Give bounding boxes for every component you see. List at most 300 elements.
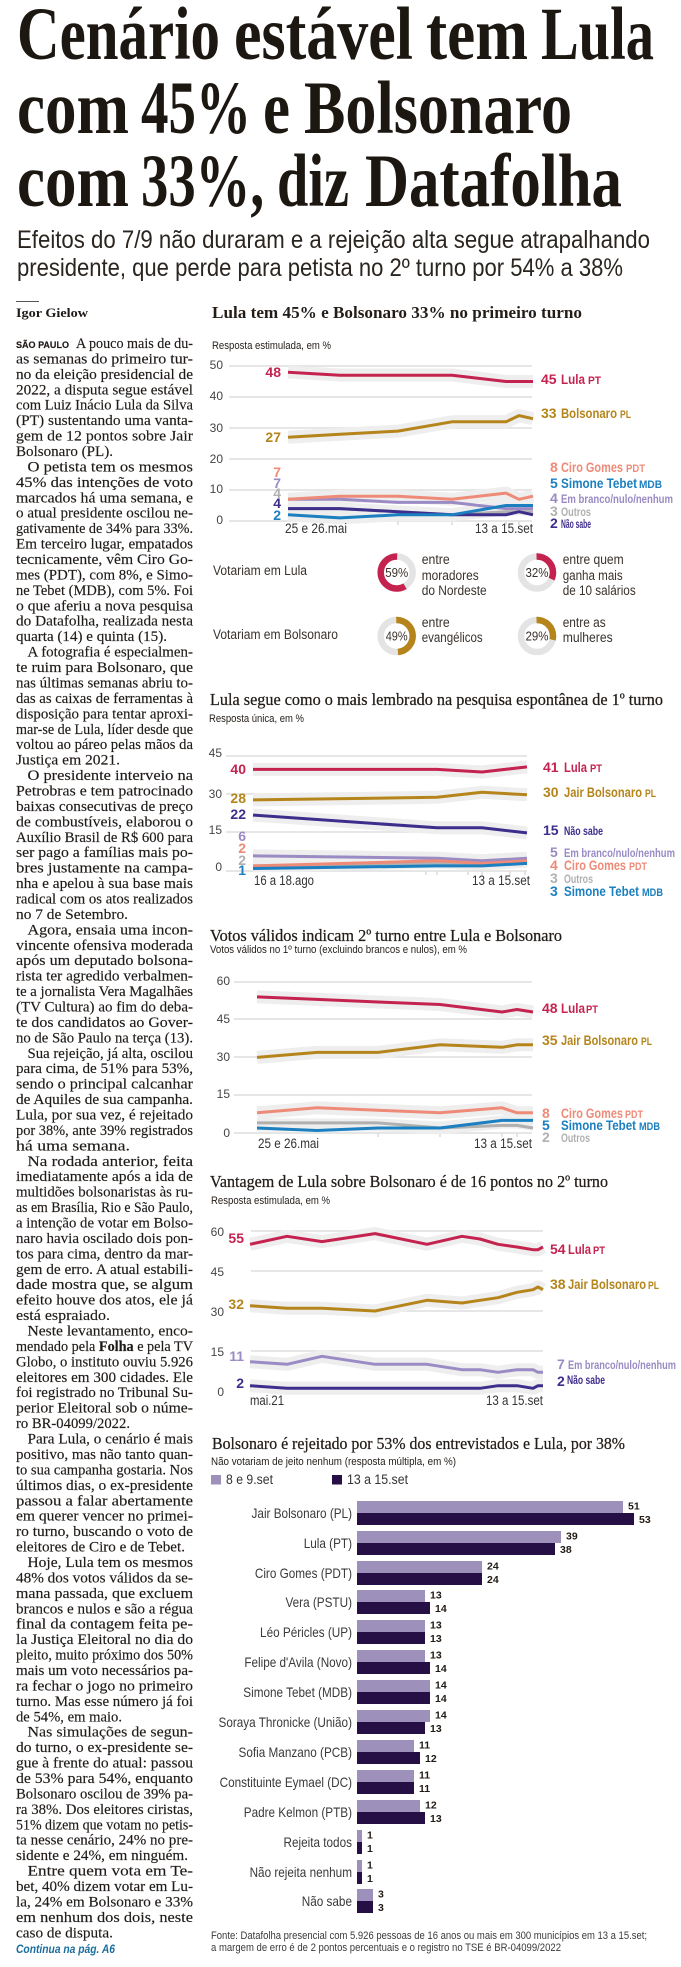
- end labels: PT: [586, 1004, 598, 1016]
- end labels: 30: [543, 784, 559, 800]
- line series: [288, 372, 533, 518]
- start labels: [265, 364, 281, 523]
- article body text: sendo o principal calcanhar: [16, 1077, 193, 1093]
- title: com: [17, 140, 129, 223]
- end labels: Simone Tebet: [561, 1117, 636, 1133]
- bar values: 3: [378, 1888, 384, 1900]
- bar values: 13: [430, 1813, 442, 1825]
- article body text: gem de erro. A atual estabili-: [16, 1262, 193, 1278]
- article body text: em nenhum dos dois, neste: [16, 1910, 193, 1926]
- article body text: por 38%, ante 39% registrados: [16, 1123, 193, 1139]
- start labels: 32: [228, 1296, 244, 1312]
- article body text: caso de disputa.: [16, 1925, 113, 1941]
- y axis: 45: [211, 1265, 224, 1279]
- article body text: no da eleição presidencial de: [16, 367, 193, 383]
- article body text: há uma semana.: [16, 1138, 130, 1154]
- article body text: perior Eleitoral sob o núme-: [16, 1401, 193, 1417]
- bar values: 51: [628, 1500, 640, 1512]
- article body text: Para Lula, o cenário é mais: [28, 1432, 193, 1448]
- article body text: ra fechar o jogo no primeiro: [16, 1678, 193, 1694]
- candidate names: Jair Bolsonaro (PL): [252, 1506, 352, 1521]
- start labels: 22: [230, 806, 246, 822]
- end labels: Ciro Gomes: [564, 857, 626, 873]
- article body text: voltou ao páreo pelas mãos da: [16, 737, 193, 753]
- start labels: 6: [238, 828, 246, 844]
- article body text: disposição para tentar aproxi-: [16, 706, 193, 722]
- line series: [257, 997, 533, 1130]
- article body text: 2022, a disputa segue estável: [16, 382, 193, 398]
- article body text: de combustíveis, elaborou o: [16, 814, 193, 830]
- article body text: efeito houve dos atos, ele já: [16, 1293, 193, 1309]
- byline: Igor Gielow: [16, 305, 89, 320]
- y axis: 30: [209, 787, 222, 801]
- article body text: Hoje, Lula tem os mesmos: [28, 1555, 193, 1571]
- end labels: 15: [543, 822, 559, 838]
- y axis: 30: [211, 1305, 224, 1319]
- x axis labels: 13 a 15.set: [475, 521, 533, 536]
- bar values: 24: [487, 1574, 499, 1586]
- article body text: bres justamente na campa-: [16, 861, 193, 877]
- end labels: PDT: [625, 1109, 643, 1121]
- article body text: rista ter agredido verbalmen-: [16, 969, 193, 985]
- article body text: mendado pela Folha e pela TV: [16, 1339, 193, 1355]
- article body text: te ruim para Bolsonaro, que: [16, 660, 193, 676]
- article body text: (PT) sustentando uma vanta-: [16, 413, 193, 429]
- end labels: [550, 1241, 676, 1389]
- start labels: 2: [238, 840, 246, 856]
- end labels: 3: [550, 503, 558, 519]
- chart note: Votos válidos no 1º turno (excluindo brancos e nulos), em %: [210, 944, 467, 956]
- article body text: A pouco mais de du-: [76, 336, 193, 352]
- y axis: 0: [217, 1385, 224, 1399]
- bar values: 38: [560, 1544, 572, 1556]
- bar values: 14: [435, 1680, 447, 1692]
- y axis: [209, 746, 222, 874]
- article body text: Em terceiro lugar, empatados: [16, 537, 193, 553]
- donut 59%: 59%: [385, 566, 408, 580]
- bar values: 1: [367, 1830, 373, 1842]
- end labels: 7: [557, 1356, 565, 1372]
- article body text: mais um voto necessários pa-: [16, 1663, 193, 1679]
- end labels: PT: [590, 763, 602, 775]
- article body text: as semanas do primeiro tur-: [16, 351, 193, 367]
- caption 59%: do Nordeste: [422, 583, 487, 598]
- end labels: 5: [550, 844, 558, 860]
- article body text: 51% dizem que votam no petis-: [16, 1817, 193, 1833]
- end labels: Outros: [564, 874, 593, 886]
- candidate names: Ciro Gomes (PDT): [255, 1566, 352, 1581]
- grid lines and uncertainty bands: [229, 366, 533, 525]
- x axis labels: 13 a 15.set: [486, 1393, 543, 1408]
- line series: [250, 1234, 543, 1388]
- legend: [211, 1472, 408, 1487]
- panel: donut breakdown: [213, 552, 636, 652]
- y axis: 40: [210, 389, 223, 403]
- caption 29%: entre as: [563, 615, 606, 630]
- chart note: Resposta única, em %: [209, 713, 304, 725]
- article body text: 48% dos votos válidos da se-: [16, 1570, 193, 1586]
- caption 29%: mulheres: [563, 630, 613, 645]
- end labels: 5: [550, 475, 558, 491]
- donut 29%: [521, 620, 553, 652]
- article body text: Entre quem vota em Te-: [28, 1864, 193, 1880]
- donut 29%: 29%: [526, 630, 548, 644]
- candidate names: Vera (PSTU): [285, 1595, 352, 1610]
- title: Datafolha: [365, 140, 622, 223]
- article body text: te a jornalista Vera Magalhães: [16, 984, 193, 1000]
- article body text: imediatamente após a ida de: [16, 1169, 193, 1185]
- y axis: 50: [210, 358, 223, 372]
- end labels: Outros: [561, 1133, 590, 1145]
- start labels: 4: [273, 495, 281, 511]
- article body text: dade mostra que, se algum: [16, 1277, 194, 1293]
- y axis: 0: [215, 860, 222, 874]
- article body text: naro havia oscilado dois pon-: [16, 1231, 193, 1247]
- grid lines and uncertainty bands: [234, 982, 533, 1137]
- article body text: nas últimas semanas abriu to-: [16, 676, 193, 692]
- x axis labels: [285, 521, 533, 536]
- y axis: [210, 358, 223, 527]
- article body text: (TV Cultura) ao fim do deba-: [16, 1000, 193, 1016]
- article body text: as em Brasília, Rio e São Paulo,: [16, 1200, 193, 1216]
- caption 49%: [422, 615, 483, 645]
- bar values: 11: [419, 1783, 430, 1795]
- x axis labels: 25 e 26.mai: [285, 521, 347, 536]
- article body text: do turno, o ex-presidente se-: [16, 1740, 193, 1756]
- article body text: multidões bolsonaristas às ru-: [16, 1185, 193, 1201]
- line series: [253, 767, 527, 868]
- start labels: 11: [229, 1348, 244, 1364]
- start labels: 2: [236, 1375, 244, 1391]
- start labels: 7: [273, 475, 281, 491]
- x axis labels: 13 a 15.set: [472, 873, 530, 888]
- title: 45%: [141, 67, 251, 150]
- article body text: para cima, de 51% para 53%,: [16, 1061, 193, 1077]
- start labels: 40: [230, 761, 246, 777]
- end labels: 35: [542, 1032, 558, 1048]
- end labels: Bolsonaro: [561, 405, 617, 421]
- end labels: MDB: [639, 1121, 660, 1133]
- panel: valid votes chart: [210, 926, 660, 1151]
- article body text: a intenção de votar em Bolso-: [16, 1216, 193, 1232]
- article body text: passou a falar abertamente: [16, 1493, 193, 1509]
- row label Lula: Votariam em Lula: [213, 563, 307, 578]
- article body text: Globo, o instituto ouviu 5.926: [16, 1354, 193, 1370]
- article body text: mes (PDT), com 8%, e Simo-: [16, 568, 193, 584]
- subtitle: [17, 226, 650, 282]
- heading: Lula segue como o mais lembrado na pesquisa espontânea de 1º turno: [210, 690, 663, 709]
- candidate names: Soraya Thronicke (União): [219, 1715, 352, 1730]
- start labels: 48: [265, 364, 281, 380]
- heading: Votos válidos indicam 2º turno entre Lula e Bolsonaro: [210, 926, 562, 945]
- article body text: Nas simulações de segun-: [28, 1725, 193, 1741]
- caption 32%: de 10 salários: [563, 583, 636, 598]
- article body text: A fotografia é especialmen-: [28, 645, 193, 661]
- bars dark: [357, 1513, 634, 1913]
- article body text: de 54%, em maio.: [16, 1709, 122, 1725]
- candidate names: Lula (PT): [304, 1536, 352, 1551]
- article body text: Lula, por sua vez, é rejeitado: [16, 1108, 193, 1124]
- bar values: 1: [367, 1860, 373, 1872]
- start labels: 1: [238, 862, 246, 878]
- chart note: Resposta estimulada, em %: [212, 340, 331, 352]
- donut 59%: [381, 556, 413, 588]
- y axis: 45: [209, 746, 222, 760]
- article body text: mana passada, que excluem: [16, 1586, 194, 1602]
- article body text: quarta (14) e quinta (15).: [16, 629, 167, 645]
- article body text: ro turno, buscando o voto de: [16, 1524, 193, 1540]
- end labels: PT: [593, 1245, 605, 1257]
- caption 59%: [422, 552, 487, 598]
- start labels: 4: [273, 485, 281, 501]
- article body text: Justiça em 2021.: [16, 753, 120, 769]
- title: 33%,: [141, 140, 264, 223]
- end labels: PL: [645, 788, 656, 800]
- candidate names: Felipe d'Avila (Novo): [244, 1655, 352, 1670]
- article body text: sidente e 24%, em ninguém.: [16, 1848, 188, 1864]
- end labels: PL: [641, 1036, 652, 1048]
- end labels: Simone Tebet: [564, 883, 639, 899]
- y axis: 30: [210, 421, 223, 435]
- caption 29%: [563, 615, 613, 645]
- article body text: Bolsonaro (PL).: [16, 444, 113, 460]
- candidate names: Não sabe: [302, 1894, 352, 1909]
- donut 32%: 32%: [526, 566, 548, 580]
- title: com: [17, 67, 129, 150]
- end labels: Jair Bolsonaro: [561, 1032, 638, 1048]
- y axis: 45: [217, 1012, 230, 1026]
- y axis: 20: [210, 452, 223, 466]
- article body text: após um deputado bolsona-: [16, 953, 193, 969]
- article body text: pleito, muito próximo dos 50%: [16, 1648, 193, 1664]
- panel: first round chart: [210, 303, 673, 536]
- candidate names: Léo Péricles (UP): [260, 1625, 352, 1640]
- bar values: 13: [430, 1620, 442, 1632]
- caption 32%: ganha mais: [563, 568, 623, 583]
- end labels: MDB: [639, 479, 662, 491]
- start labels: 28: [230, 790, 246, 806]
- end labels: PDT: [626, 463, 645, 475]
- bar values: 11: [419, 1770, 430, 1782]
- end labels: [543, 759, 675, 899]
- bar values: 14: [435, 1663, 447, 1675]
- article body text: Neste levantamento, enco-: [28, 1324, 193, 1340]
- bar values: 13: [430, 1723, 442, 1735]
- donut 49%: [381, 620, 413, 652]
- end labels: 48: [542, 1000, 558, 1016]
- bar values: 12: [425, 1800, 437, 1812]
- donut 32%: [521, 556, 553, 588]
- title: diz: [277, 140, 349, 223]
- bar values: 3: [378, 1902, 384, 1914]
- title: [17, 0, 654, 223]
- article body text: ne Tebet (MDB), com 5%. Foi: [16, 583, 193, 599]
- start labels: 2: [238, 852, 246, 868]
- article body text: gem de 12 pontos sobre Jair: [16, 429, 193, 445]
- candidate names: Rejeita todos: [283, 1835, 352, 1850]
- article body text: gue à frente do atual: passou: [16, 1756, 194, 1772]
- title: e: [263, 67, 290, 150]
- article body text: mar-se de Lula, líder desde que: [16, 722, 193, 738]
- caption 49%: evangélicos: [422, 630, 483, 645]
- legend: 8 e 9.set: [226, 1472, 273, 1487]
- article body text: brancos e nulos e são a régua: [16, 1601, 193, 1617]
- end labels: [541, 371, 673, 531]
- article body text: está espraiado.: [16, 1308, 110, 1324]
- article body text: gativamente de 34% para 33%.: [16, 521, 193, 537]
- start labels: [228, 1230, 244, 1391]
- bar values: 24: [487, 1560, 499, 1572]
- caption 59%: moradores: [422, 568, 479, 583]
- start labels: [230, 761, 246, 878]
- row label Bolsonaro: Votariam em Bolsonaro: [213, 627, 338, 642]
- article body text: vincente ofensiva moderada: [16, 938, 193, 954]
- caption 32%: [563, 552, 636, 598]
- end labels: PL: [648, 1280, 659, 1292]
- article body text: em querer vencer no primei-: [16, 1509, 193, 1525]
- article body text: Na rodada anterior, feita: [28, 1154, 193, 1170]
- x axis labels: mai.21: [250, 1393, 284, 1408]
- title: Bolsonaro: [304, 67, 572, 150]
- end labels: Não sabe: [567, 1375, 605, 1387]
- y axis: 0: [216, 513, 223, 527]
- candidate names: Constituinte Eymael (DC): [220, 1775, 352, 1790]
- article body text: com Luiz Inácio Lula da Silva: [16, 398, 193, 414]
- grid lines and uncertainty bands: [226, 756, 527, 875]
- article body text: bet, 40% dizem votar em Lu-: [16, 1879, 193, 1895]
- x axis labels: 13 a 15.set: [474, 1136, 532, 1151]
- caption 59%: entre: [422, 552, 450, 567]
- bar values: 12: [425, 1753, 437, 1765]
- heading: Bolsonaro é rejeitado por 53% dos entrevistados e Lula, por 38%: [212, 1434, 625, 1453]
- x axis labels: 25 e 26.mai: [258, 1136, 319, 1151]
- article body text: O presidente interveio na: [28, 768, 193, 784]
- candidate names: Padre Kelmon (PTB): [244, 1805, 352, 1820]
- y axis: [211, 1225, 224, 1399]
- end labels: 4: [550, 857, 558, 873]
- panel: second round chart: [210, 1172, 676, 1408]
- bar values: 53: [639, 1514, 651, 1526]
- y axis: 15: [211, 1345, 224, 1359]
- end labels: 8: [550, 459, 558, 475]
- article body text: o atual presidente oscilou ne-: [16, 506, 193, 522]
- end labels: 54: [550, 1241, 566, 1257]
- y axis: 0: [223, 1126, 230, 1140]
- article body text: positivo, mas não tanto quan-: [16, 1447, 193, 1463]
- panel: rejection bar chart: [211, 1434, 651, 1914]
- caption 49%: entre: [422, 615, 450, 630]
- bars light: [357, 1501, 623, 1901]
- bar values: 39: [566, 1530, 578, 1542]
- article body text: final da contagem feita pe-: [16, 1617, 193, 1633]
- article body text: últimos dias, o ex-presidente: [16, 1478, 193, 1494]
- end labels: 41: [543, 759, 559, 775]
- grid lines and uncertainty bands: [250, 1231, 543, 1391]
- end labels: 3: [550, 870, 558, 886]
- end labels: PL: [620, 409, 631, 421]
- article body text: SÃO PAULO: [16, 340, 69, 351]
- article body text: [16, 336, 194, 1941]
- end labels: 5: [542, 1117, 550, 1133]
- end labels: 2: [542, 1129, 550, 1145]
- article body text: Agora, ensaia uma incon-: [28, 922, 193, 938]
- end labels: Jair Bolsonaro: [568, 1276, 646, 1292]
- article body text: de Aquiles de sua campanha.: [16, 1092, 193, 1108]
- article body text: eleitores em 300 cidades. Ele: [16, 1370, 193, 1386]
- candidate names: [219, 1506, 352, 1909]
- candidate names: Sofia Manzano (PCB): [239, 1745, 352, 1760]
- end labels: Ciro Gomes: [561, 459, 623, 475]
- article body text: la, 24% em Bolsonaro e 33%: [16, 1894, 193, 1910]
- bar values: 14: [435, 1693, 447, 1705]
- bar values: 1: [367, 1843, 373, 1855]
- article body text: ra 38%. Dos eleitores ciristas,: [16, 1802, 193, 1818]
- article body text: ro BR-04099/2022.: [16, 1416, 130, 1432]
- donut 49%: 49%: [386, 630, 408, 644]
- end labels: 4: [550, 490, 558, 506]
- end labels: 38: [550, 1276, 566, 1292]
- end labels: Lula: [561, 371, 585, 387]
- panel: spontaneous chart: [209, 690, 675, 899]
- end labels: Não sabe: [564, 826, 603, 838]
- bar values: 1: [367, 1873, 373, 1885]
- bar values: [367, 1500, 651, 1914]
- continuation note: Continua na pág. A6: [16, 1942, 115, 1956]
- article body text: Sua rejeição, já alta, oscilou: [28, 1046, 194, 1062]
- end labels: Ciro Gomes: [561, 1105, 623, 1121]
- y axis: [217, 974, 230, 1140]
- heading: Vantagem de Lula sobre Bolsonaro é de 16 pontos no 2º turno: [210, 1172, 608, 1191]
- start labels: 27: [265, 429, 281, 445]
- end labels: Não sabe: [561, 519, 591, 531]
- start labels: 2: [273, 507, 281, 523]
- end labels: Outros: [561, 507, 591, 519]
- article body text: no 7 de Setembro.: [16, 907, 128, 923]
- bar values: 13: [430, 1633, 442, 1645]
- article body text: radical com os atos realizados: [16, 892, 193, 908]
- end labels: Jair Bolsonaro: [564, 784, 642, 800]
- source note: a margem de erro é de 2 pontos percentuais e o registro no TSE é BR-04099/2022: [211, 1942, 561, 1954]
- end labels: Lula: [564, 759, 587, 775]
- x axis labels: 16 a 18.ago: [254, 873, 314, 888]
- end labels: 8: [542, 1105, 550, 1121]
- y axis: 15: [209, 823, 222, 837]
- article body text: Auxílio Brasil de R$ 600 para: [16, 830, 193, 846]
- article body text: do Datafolha, realizada nesta: [16, 614, 193, 630]
- chart note: Não votariam de jeito nenhum (resposta múltipla, em %): [211, 1456, 456, 1468]
- article body text: marcados há uma semana, e: [16, 490, 193, 506]
- end labels: 2: [550, 515, 558, 531]
- bar values: 13: [430, 1650, 442, 1662]
- end labels: 33: [541, 405, 557, 421]
- article body text: no de São Paulo na terça (13).: [16, 1030, 193, 1046]
- x axis labels: [258, 1136, 532, 1151]
- article body text: la Justiça Eleitoral no dia do: [16, 1632, 193, 1648]
- article body text: Petrobras e tem patrocinado: [16, 784, 193, 800]
- bar values: 14: [435, 1603, 447, 1615]
- end labels: [542, 1000, 660, 1145]
- source note: [211, 1930, 647, 1954]
- legend: 13 a 15.set: [347, 1472, 408, 1487]
- end labels: Simone Tebet: [561, 475, 637, 491]
- article body text: ser pago a famílias mais po-: [16, 845, 193, 861]
- caption 32%: entre quem: [563, 552, 624, 567]
- y axis: 15: [217, 1087, 230, 1101]
- end labels: Lula: [561, 1000, 585, 1016]
- article body text: nha e apelou à sua base mais: [16, 876, 193, 892]
- y axis: 30: [217, 1050, 230, 1064]
- article body text: tecnicamente, vêm Ciro Go-: [16, 552, 193, 568]
